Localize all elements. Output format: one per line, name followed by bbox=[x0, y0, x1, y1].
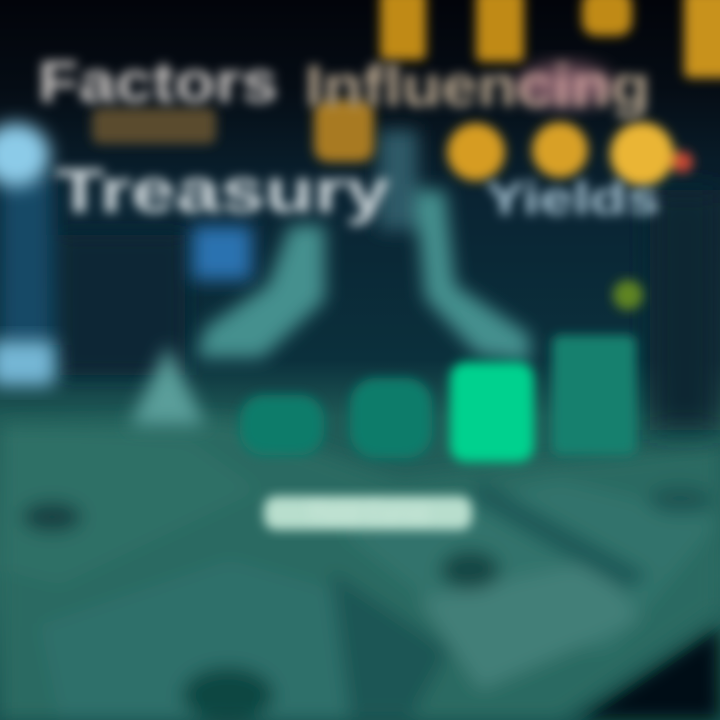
label pill: Yield Curve bbox=[308, 500, 428, 525]
icon: left light blue lower tile bbox=[0, 340, 56, 386]
chart: central arrows bbox=[130, 130, 530, 425]
bar chart: green bars bbox=[240, 335, 636, 462]
icon: left light blue top tile bbox=[0, 123, 50, 187]
heading: title: Treasury bbox=[55, 157, 391, 226]
panel: banknote field bbox=[0, 420, 720, 720]
bar 3 highlighted bbox=[450, 362, 534, 462]
label pill bbox=[264, 496, 472, 530]
panel: right dark column bbox=[650, 190, 720, 430]
icon: gold top bars bbox=[380, 0, 720, 78]
heading: title: Yields bbox=[485, 172, 660, 224]
icon: small yellow-green arrow bbox=[613, 280, 643, 310]
panel: left dark column bbox=[0, 175, 185, 375]
pink title accent bbox=[517, 63, 613, 107]
heading: title bbox=[38, 50, 660, 226]
heading: title: Influencing bbox=[305, 54, 650, 119]
heading: title: Factors bbox=[38, 50, 278, 115]
icon: blue square bbox=[192, 226, 252, 280]
bar 1 bbox=[240, 395, 324, 455]
bar 2 bbox=[350, 378, 432, 458]
icon: gold coins row bbox=[92, 100, 693, 186]
bar 4 bbox=[552, 335, 636, 455]
